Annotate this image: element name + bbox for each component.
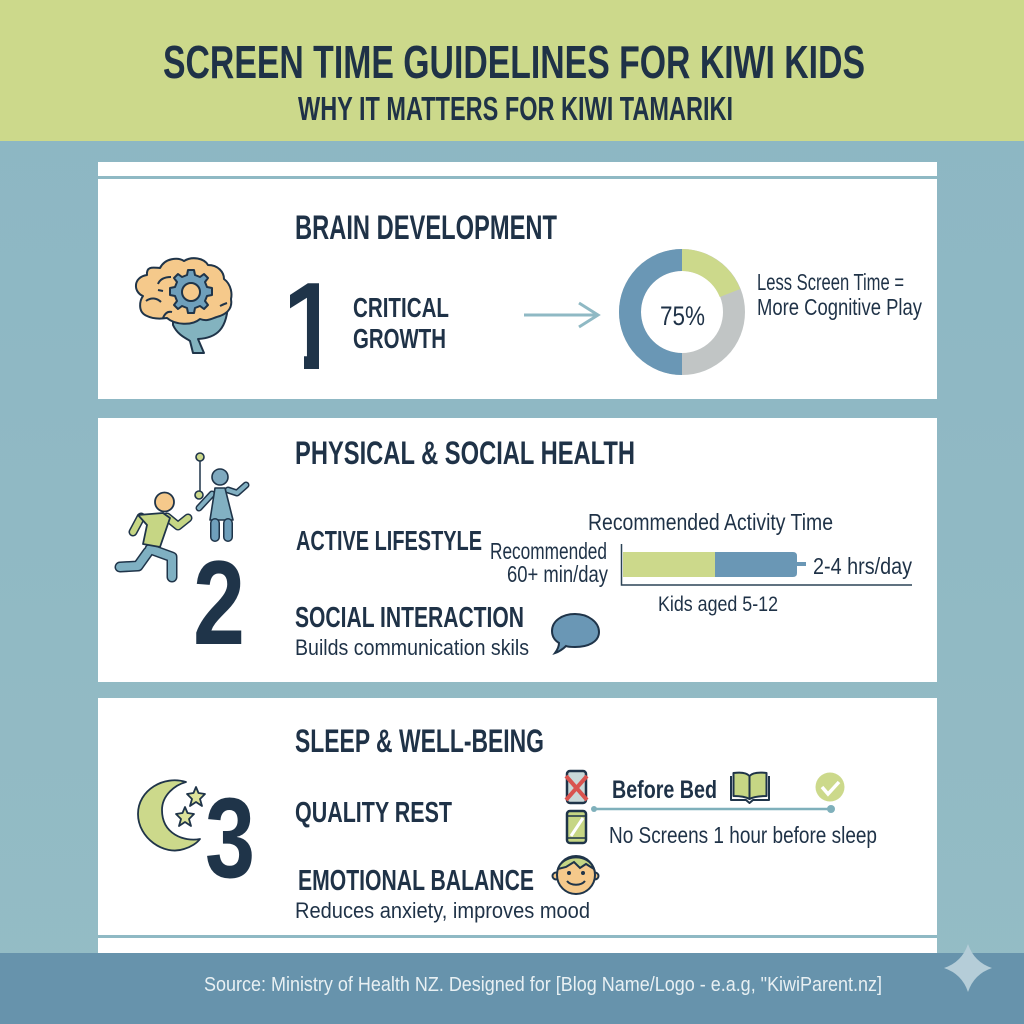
label: social interaction bbox=[295, 602, 529, 660]
arrow bbox=[524, 303, 598, 327]
icon: moon and stars bbox=[138, 780, 205, 851]
donut caption: Less Screen Time = bbox=[757, 269, 904, 295]
number 1: 1 bbox=[278, 258, 347, 396]
icon: sparkle bbox=[944, 944, 992, 992]
header banner bbox=[0, 0, 1024, 141]
label: social interaction: Builds communication skils bbox=[295, 635, 529, 660]
chart left label: Recommended bbox=[490, 538, 607, 564]
timeline bbox=[591, 805, 835, 813]
label: quality rest: QUALITY REST bbox=[295, 797, 452, 829]
label: emotional balance bbox=[295, 865, 590, 923]
icon: running child and child with ball bbox=[120, 453, 246, 577]
chart left label bbox=[490, 538, 608, 587]
footer bbox=[0, 944, 1024, 1024]
icon: speech bubble bbox=[552, 614, 599, 653]
donut caption bbox=[757, 269, 922, 320]
label: before bed: Before Bed bbox=[612, 776, 717, 804]
label: social interaction: SOCIAL INTERACTION bbox=[295, 602, 524, 634]
icon: crossed phone bbox=[566, 771, 587, 803]
bar chart: recommended activity time bbox=[490, 509, 912, 616]
number 2: 2 bbox=[193, 536, 245, 670]
chart title: Recommended Activity Time bbox=[588, 509, 833, 535]
label: critical growth bbox=[353, 292, 449, 354]
label: emotional balance: EMOTIONAL BALANCE bbox=[298, 865, 534, 897]
heading: sleep and well-being: SLEEP & WELL-BEING bbox=[295, 723, 544, 759]
icon: open book bbox=[731, 773, 769, 803]
label: emotional balance: Reduces anxiety, improves mood bbox=[295, 898, 590, 923]
icon: brain with gear bbox=[136, 258, 231, 353]
label: active lifestyle: ACTIVE LIFESTYLE bbox=[296, 525, 482, 556]
panel: physical and social health bbox=[98, 418, 937, 682]
donut chart bbox=[630, 260, 734, 364]
label: critical growth: GROWTH bbox=[353, 323, 446, 354]
icon: smiling child face bbox=[552, 856, 598, 894]
panel: brain development bbox=[98, 162, 937, 399]
timeline caption: No Screens 1 hour before sleep bbox=[609, 822, 877, 848]
chart axis label: Kids aged 5-12 bbox=[658, 593, 778, 616]
icon: check badge bbox=[816, 772, 844, 802]
subtitle: WHY IT MATTERS FOR KIWI TAMARIKI bbox=[298, 90, 733, 127]
heading: physical and social health: PHYSICAL & SOCIAL HEALTH bbox=[295, 435, 635, 471]
heading: brain development: BRAIN DEVELOPMENT bbox=[295, 209, 557, 247]
donut value: 75% bbox=[660, 301, 705, 331]
number 3: 3 bbox=[205, 775, 255, 902]
donut caption: More Cognitive Play bbox=[757, 294, 922, 320]
icon: phone bbox=[566, 811, 587, 843]
chart left label: 60+ min/day bbox=[507, 561, 608, 587]
label: critical growth: CRITICAL bbox=[353, 292, 449, 323]
source line: Source: Ministry of Health NZ. Designed for [Blog Name/Logo - e.a.g, "KiwiParent.nz] bbox=[204, 974, 882, 996]
panel: sleep and well-being bbox=[98, 698, 937, 953]
chart value: 2-4 hrs/day bbox=[813, 553, 912, 579]
